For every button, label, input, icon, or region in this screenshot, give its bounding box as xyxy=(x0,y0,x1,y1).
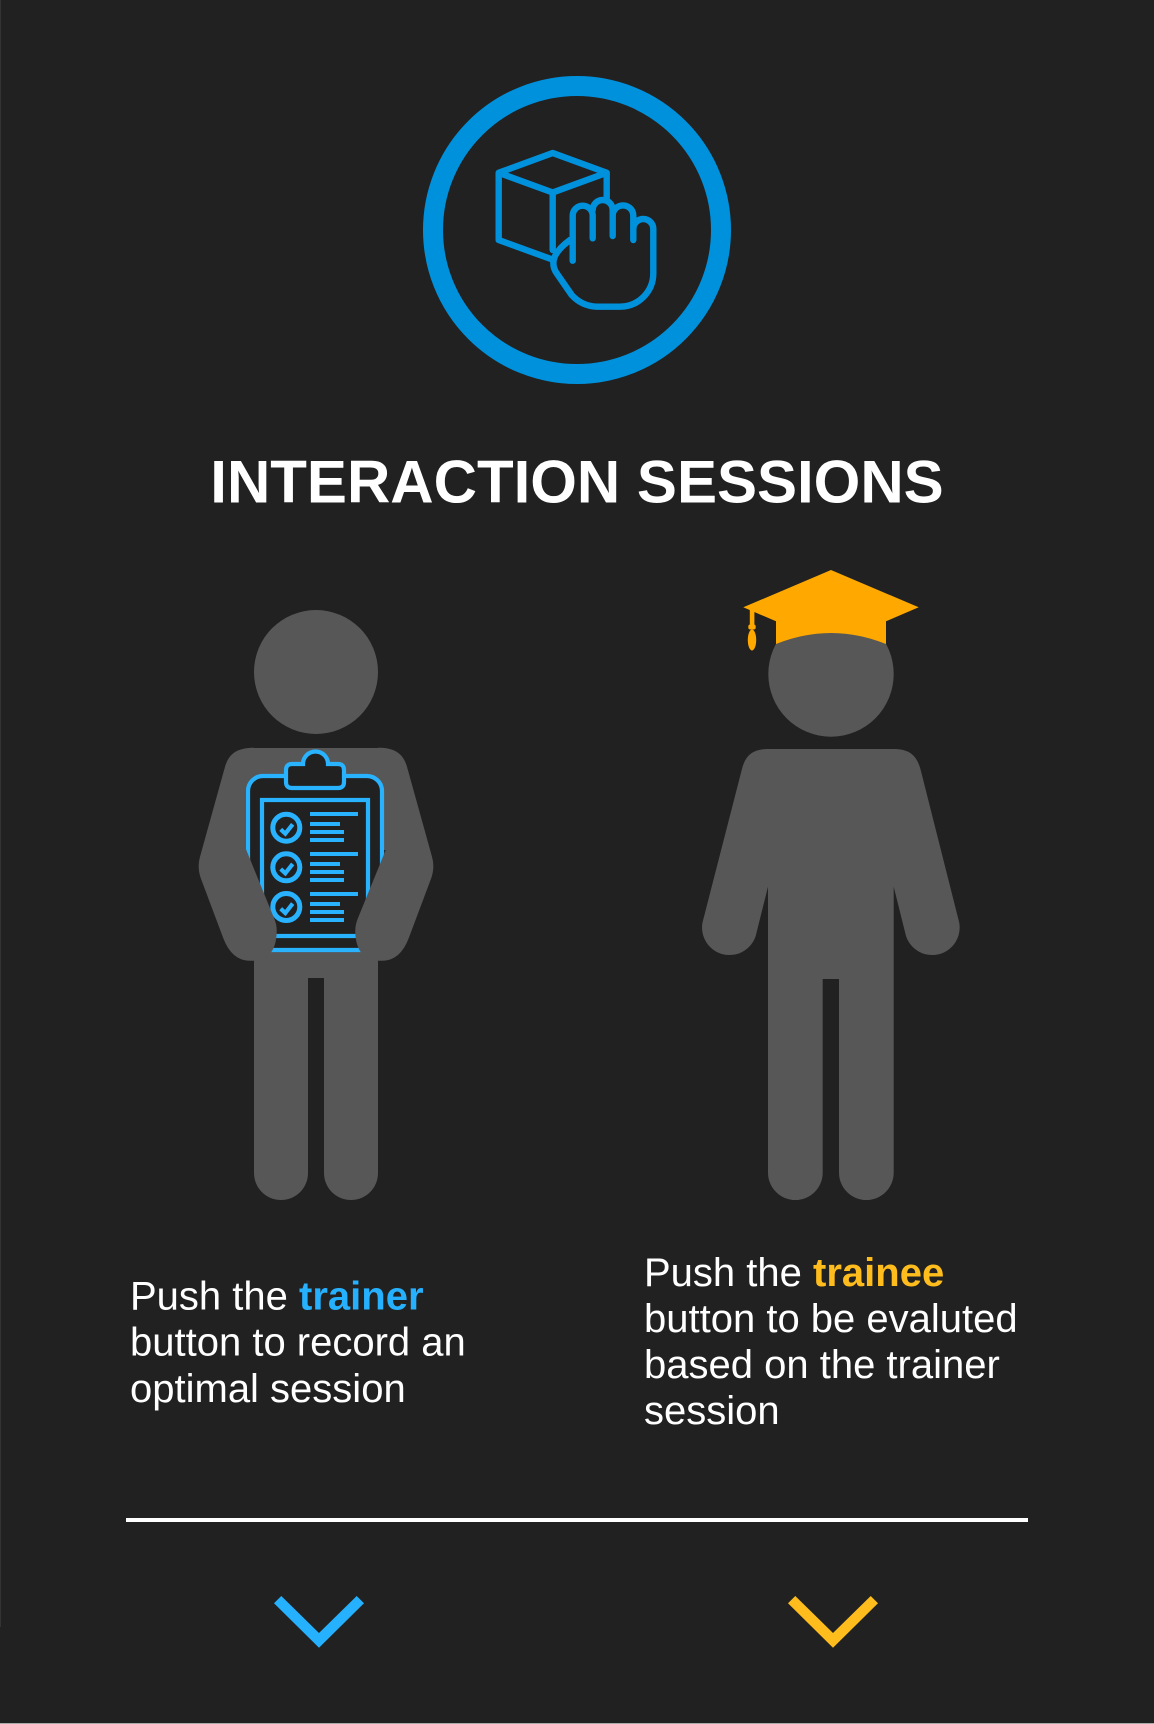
trainee body xyxy=(702,749,960,1200)
trainee instructions: Push the trainee xyxy=(644,1251,944,1295)
icon: graduation cap xyxy=(743,570,919,650)
trainer figure with clipboard xyxy=(199,610,433,1200)
trainer instructions: optimal session xyxy=(130,1367,406,1411)
divider line xyxy=(126,1518,1028,1522)
trainer head xyxy=(254,610,378,734)
arrow: trainer chevron xyxy=(274,1596,364,1648)
trainer left arm xyxy=(199,748,277,961)
icon: clipboard checklist xyxy=(248,752,382,950)
trainee instructions: button to be evaluted xyxy=(644,1297,1018,1341)
trainer instructions: Push the trainer xyxy=(130,1274,424,1318)
trainee head xyxy=(768,611,894,737)
trainee instructions: session xyxy=(644,1389,780,1433)
title: INTERACTION SESSIONS xyxy=(210,448,944,516)
trainer right arm xyxy=(355,748,433,961)
icon: circle with cube and hand xyxy=(433,86,721,374)
icon: hand xyxy=(553,200,653,307)
trainee instructions: based on the trainer xyxy=(644,1343,1000,1387)
trainer torso and legs xyxy=(240,748,392,1200)
trainee figure with graduation cap xyxy=(702,570,960,1200)
trainer instructions: button to record an xyxy=(130,1321,466,1365)
icon: cube xyxy=(499,153,607,259)
arrow: trainee chevron xyxy=(788,1596,878,1648)
